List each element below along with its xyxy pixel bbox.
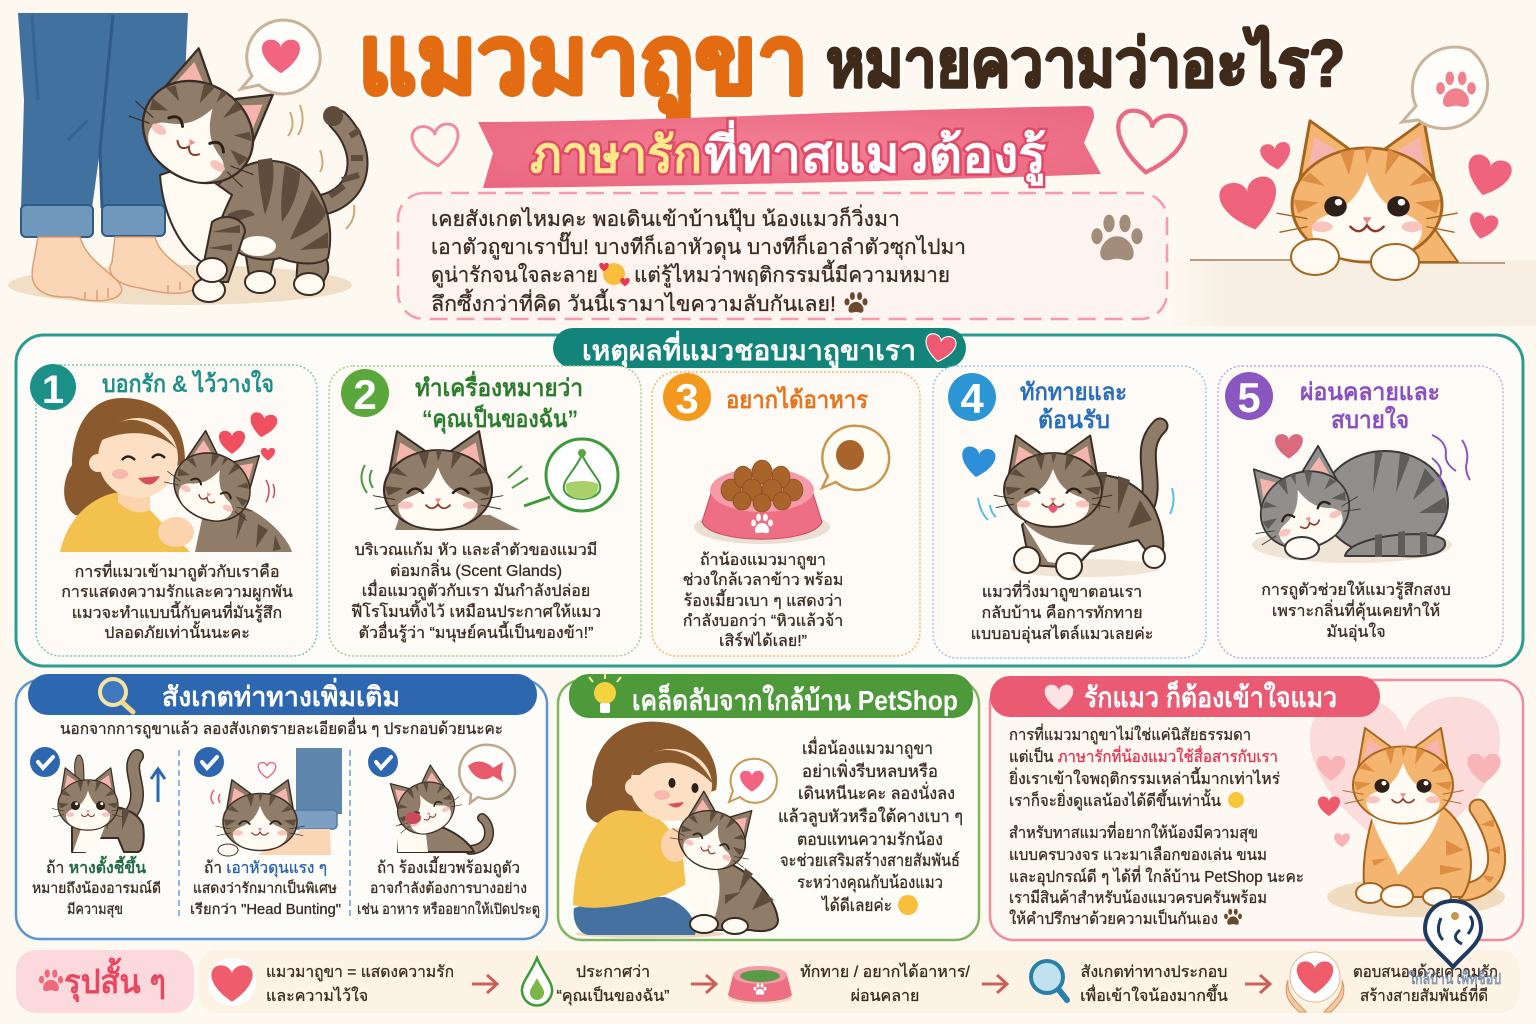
step: greet, food, relax: ทักทาย / อยากได้อาหาร/ [800, 962, 970, 981]
arrow 4 [1245, 975, 1270, 993]
card 3: wants food [652, 372, 920, 656]
card 3: wants food: อยากได้อาหาร [726, 385, 868, 414]
ribbon: subtitle [478, 106, 1101, 188]
intro text box: ลึกซึ้งกว่าที่คิด วันนี้เรามาไขความลับกันเลย! [431, 289, 836, 316]
panel: love cats, understand cats [990, 676, 1523, 940]
card 4: greeting [933, 366, 1206, 658]
step: announce: “คุณเป็นของฉัน” [557, 985, 669, 1006]
item: head bunting: เรียกว่า "Head Bunting" [190, 901, 341, 918]
icon: heart speech bubble [241, 20, 320, 94]
card 1: love and trust: บอกรัก & ไว้วางใจ [102, 369, 274, 398]
heading: tip: เคล็ดลับจากใกล้บ้าน PetShop [632, 683, 958, 716]
card 3: wants food: เสิร์ฟได้เลย!” [719, 631, 807, 650]
step: greet, food, relax [728, 962, 970, 1005]
item: meowing: ถ้า ร้องเมี้ยวพร้อมถูตัว [377, 856, 520, 878]
intro text box: ดูน่ารักจนใจละลาย [431, 263, 598, 288]
panel: love cats, understand cats: แบบครบวงจร แวะมาเลือกของเล่น ขนม [1009, 846, 1267, 864]
panel: love cats, understand cats: เราก็จะยิ่งดูแลน้องได้ดีขึ้นเท่านั้น [1009, 789, 1221, 811]
panel: love cats, understand cats: เรามีสินค้าสำหรับน้องแมวครบครันพร้อม [1009, 889, 1267, 907]
title: main heading: แมวมาถูขา [358, 7, 808, 120]
item: tail up: ถ้า หางตั้งชี้ขึ้น [46, 855, 146, 877]
illustration: woman petting cat [573, 722, 778, 938]
heading: observe more: สังเกตท่าทางเพิ่มเติม [162, 677, 400, 712]
step: observe: เพื่อเข้าใจน้องมากขึ้น [1080, 984, 1228, 1005]
item: meowing: อาจกำลังต้องการบางอย่าง [370, 880, 527, 897]
arrow 3 [982, 975, 1007, 993]
panel: reasons cats rub [16, 328, 1523, 666]
card 3: wants food: 3 [675, 375, 699, 422]
intro text box: เคยสังเกตไหมคะ พอเดินเข้าบ้านปุ๊บ น้องแมวก็วิ่งมา [431, 204, 900, 232]
card 5: relaxing [1218, 366, 1503, 658]
panel: love cats, understand cats: ให้คำปรึกษาด้วยความเป็นกันเอง [1009, 908, 1218, 928]
title: main heading [358, 7, 1345, 120]
card 5: relaxing: สบายใจ [1331, 405, 1409, 434]
step: respond with love [1286, 952, 1498, 1012]
panel: love cats, understand cats: ยิ่งเราเข้าใจพฤติกรรมเหล่านี้มากเท่าไหร่ [1009, 767, 1280, 788]
arrow 2 [691, 975, 716, 993]
panel: love cats, understand cats: สำหรับทาสแมวที่อยากให้น้องมีความสุข [1009, 821, 1258, 843]
card 2: scent marking: “คุณเป็นของฉัน” [422, 404, 578, 435]
panel: love cats, understand cats: การที่แมวมาถูขาไม่ใช่แค่นิสัยธรรมดา [1009, 723, 1251, 745]
panel heading [553, 328, 966, 368]
card 3: wants food: ร้องเมี้ยวเบา ๆ แสดงว่า [684, 589, 842, 610]
card 4: greeting: แมวที่วิ่งมาถูขาตอนเรา [982, 580, 1142, 602]
intro text box: แต่รู้ไหมว่าพฤติกรรมนี้มีความหมาย [634, 260, 950, 288]
heading: love cats: รักแมว ก็ต้องเข้าใจแมว [1084, 680, 1337, 713]
watermark logo: ใกล้บ้าน เพ็ทช็อป [1409, 969, 1501, 988]
item: meowing [357, 745, 540, 918]
intro text box: เอาตัวถูขาเราปั๊บ! บางทีก็เอาหัวดุน บางทีก็เอาลำตัวซุกไปมา [431, 231, 966, 260]
panel: more body language [16, 674, 547, 939]
heading: tip [569, 674, 973, 718]
illustration: sitting orange cat with hearts [1310, 697, 1505, 917]
card 5: relaxing: เพราะกลิ่นที่คุ้นเคยทำให้ [1272, 599, 1440, 621]
watermark logo [1409, 901, 1501, 988]
panel: tip from PetShop: เดินหนีนะคะ ลองนั่งลง [798, 781, 955, 803]
panel: tip from PetShop: ตอบแทนความรักน้อง [797, 830, 943, 849]
item: head bunting: ถ้า เอาหัวดุนแรง ๆ [204, 859, 327, 878]
item: meowing: เช่น อาหาร หรืออยากให้เปิดประตู [357, 900, 540, 918]
illustration: orange cat peeking over table [1170, 121, 1536, 326]
card 1: love and trust: การที่แมวเข้ามาถูตัวกับเราคือ [75, 560, 279, 582]
card 4: greeting: แบบอบอุ่นสไตล์แมวเลยค่ะ [971, 624, 1153, 644]
card 5: relaxing: 5 [1237, 374, 1261, 421]
card 1: love and trust: แมวจะทำแบบนี้กับคนที่มันรู้สึก [72, 601, 282, 623]
panel: tip from PetShop: ได้ดีเลยค่ะ [820, 895, 892, 915]
panel: tip from PetShop: แล้วลูบหัวหรือใต้คางเบา ๆ [778, 806, 963, 827]
card 2: scent marking [329, 366, 641, 656]
card 2: scent marking: บริเวณแก้ม หัว และลำตัวของแมวมี [355, 541, 597, 559]
card 2: scent marking: ฟีโรโมนทิ้งไว้ เหมือนประกาศให้แมว [351, 600, 601, 621]
card 2: scent marking: ต่อมกลิ่น (Scent Glands) [390, 559, 562, 580]
step: announce [522, 958, 669, 1006]
panel: tip from PetShop: จะช่วยเสริมสร้างสายสัมพันธ์ [780, 851, 960, 870]
step: respond with love: สร้างสายสัมพันธ์ที่ดี [1360, 984, 1488, 1005]
panel: tip from PetShop: ระหว่างคุณกับน้องแมว [797, 873, 943, 893]
ribbon: subtitle: ที่ทาสแมวต้องรู้ [704, 120, 1046, 186]
step: love and trust [208, 958, 454, 1006]
card 5: relaxing: ผ่อนคลายและ [1300, 379, 1440, 406]
arrow 1 [472, 975, 497, 993]
icon: paw speech bubble [1402, 47, 1488, 129]
panel: tip from PetShop [558, 674, 979, 940]
card 4: greeting: 4 [960, 375, 984, 422]
card 1: love and trust: การแสดงความรักและความผูกพัน [61, 584, 293, 602]
step: observe [1031, 961, 1228, 1005]
card 5: relaxing: มันอุ่นใจ [1326, 622, 1386, 642]
panel: love cats, understand cats: และอุปกรณ์ดี ๆ ได้ที่ ใกล้บ้าน PetShop นะคะ [1009, 865, 1304, 887]
intro text box [398, 193, 1167, 319]
card 2: scent marking: ทำเครื่องหมายว่า [415, 370, 583, 402]
card 2: scent marking: 2 [353, 371, 377, 418]
card 3: wants food: กำลังบอกว่า “หิวแล้วจ้า [683, 612, 843, 630]
summary label: รุปสั้น ๆ [64, 957, 166, 1003]
item: head bunting [190, 747, 342, 918]
item: head bunting: แสดงว่ารักมากเป็นพิเศษ [193, 878, 337, 897]
card 5: relaxing: การถูตัวช่วยให้แมวรู้สึกสงบ [1261, 580, 1451, 600]
step: love and trust: แมวมาถูขา = แสดงความรัก [266, 964, 454, 982]
card 4: greeting: ต้อนรับ [1038, 407, 1110, 434]
heading: observe more [28, 674, 537, 715]
step: love and trust: และความไว้ใจ [266, 986, 368, 1005]
summary label [16, 950, 194, 1013]
illustration: cat rubbing against owner's legs [8, 13, 363, 305]
step: announce: ประกาศว่า [576, 964, 650, 981]
card 3: wants food: ช่วงใกล้เวลาข้าว พร้อม [683, 570, 843, 589]
panel: love cats, understand cats: แต่เป็น ภาษารักที่น้องแมวใช้สื่อสารกับเรา [1009, 745, 1278, 766]
panel: tip from PetShop: เมื่อน้องแมวมาถูขา [802, 736, 933, 759]
icon: outline heart left [411, 123, 461, 168]
panel heading: เหตุผลที่แมวชอบมาถูขาเรา [582, 330, 916, 368]
item: tail up: หมายถึงน้องอารมณ์ดี [32, 880, 161, 897]
step: observe: สังเกตท่าทางประกอบ [1081, 964, 1227, 981]
panel: more body language: นอกจากการถูขาแล้ว ลองสังเกตรายละเอียดอื่น ๆ ประกอบด้วยนะคะ [60, 717, 503, 739]
card 1: love and trust [30, 364, 317, 656]
heading: love cats [990, 676, 1380, 717]
ribbon: subtitle: ภาษารัก [530, 127, 702, 183]
title: main heading: หมายความว่าอะไร? [826, 25, 1345, 100]
card 1: love and trust: ปลอดภัยเท่านั้นนะคะ [104, 621, 250, 642]
summary strip [198, 950, 1520, 1013]
card 2: scent marking: เมื่อแมวถูตัวกับเรา มันกำลังปล่อย [362, 579, 590, 601]
icon: outline heart right [1112, 109, 1187, 177]
card 4: greeting: ทักทายและ [1020, 379, 1127, 406]
card 2: scent marking: ตัวอื่นรู้ว่า “มนุษย์คนนี้เป็นของข้า!” [359, 621, 593, 643]
item: tail up: มีความสุข [67, 901, 123, 918]
card 4: greeting: กลับบ้าน คือการทักทาย [982, 604, 1142, 622]
panel: tip from PetShop: อย่าเพิ่งรีบหลบหรือ [802, 759, 938, 781]
card 1: love and trust: 1 [42, 368, 64, 412]
step: respond with love: ตอบสนองด้วยความรัก [1353, 963, 1498, 981]
card 3: wants food: ถ้าน้องแมวมาถูขา [700, 551, 826, 570]
step: greet, food, relax: ผ่อนคลาย [851, 988, 919, 1005]
item: tail up [30, 747, 165, 918]
